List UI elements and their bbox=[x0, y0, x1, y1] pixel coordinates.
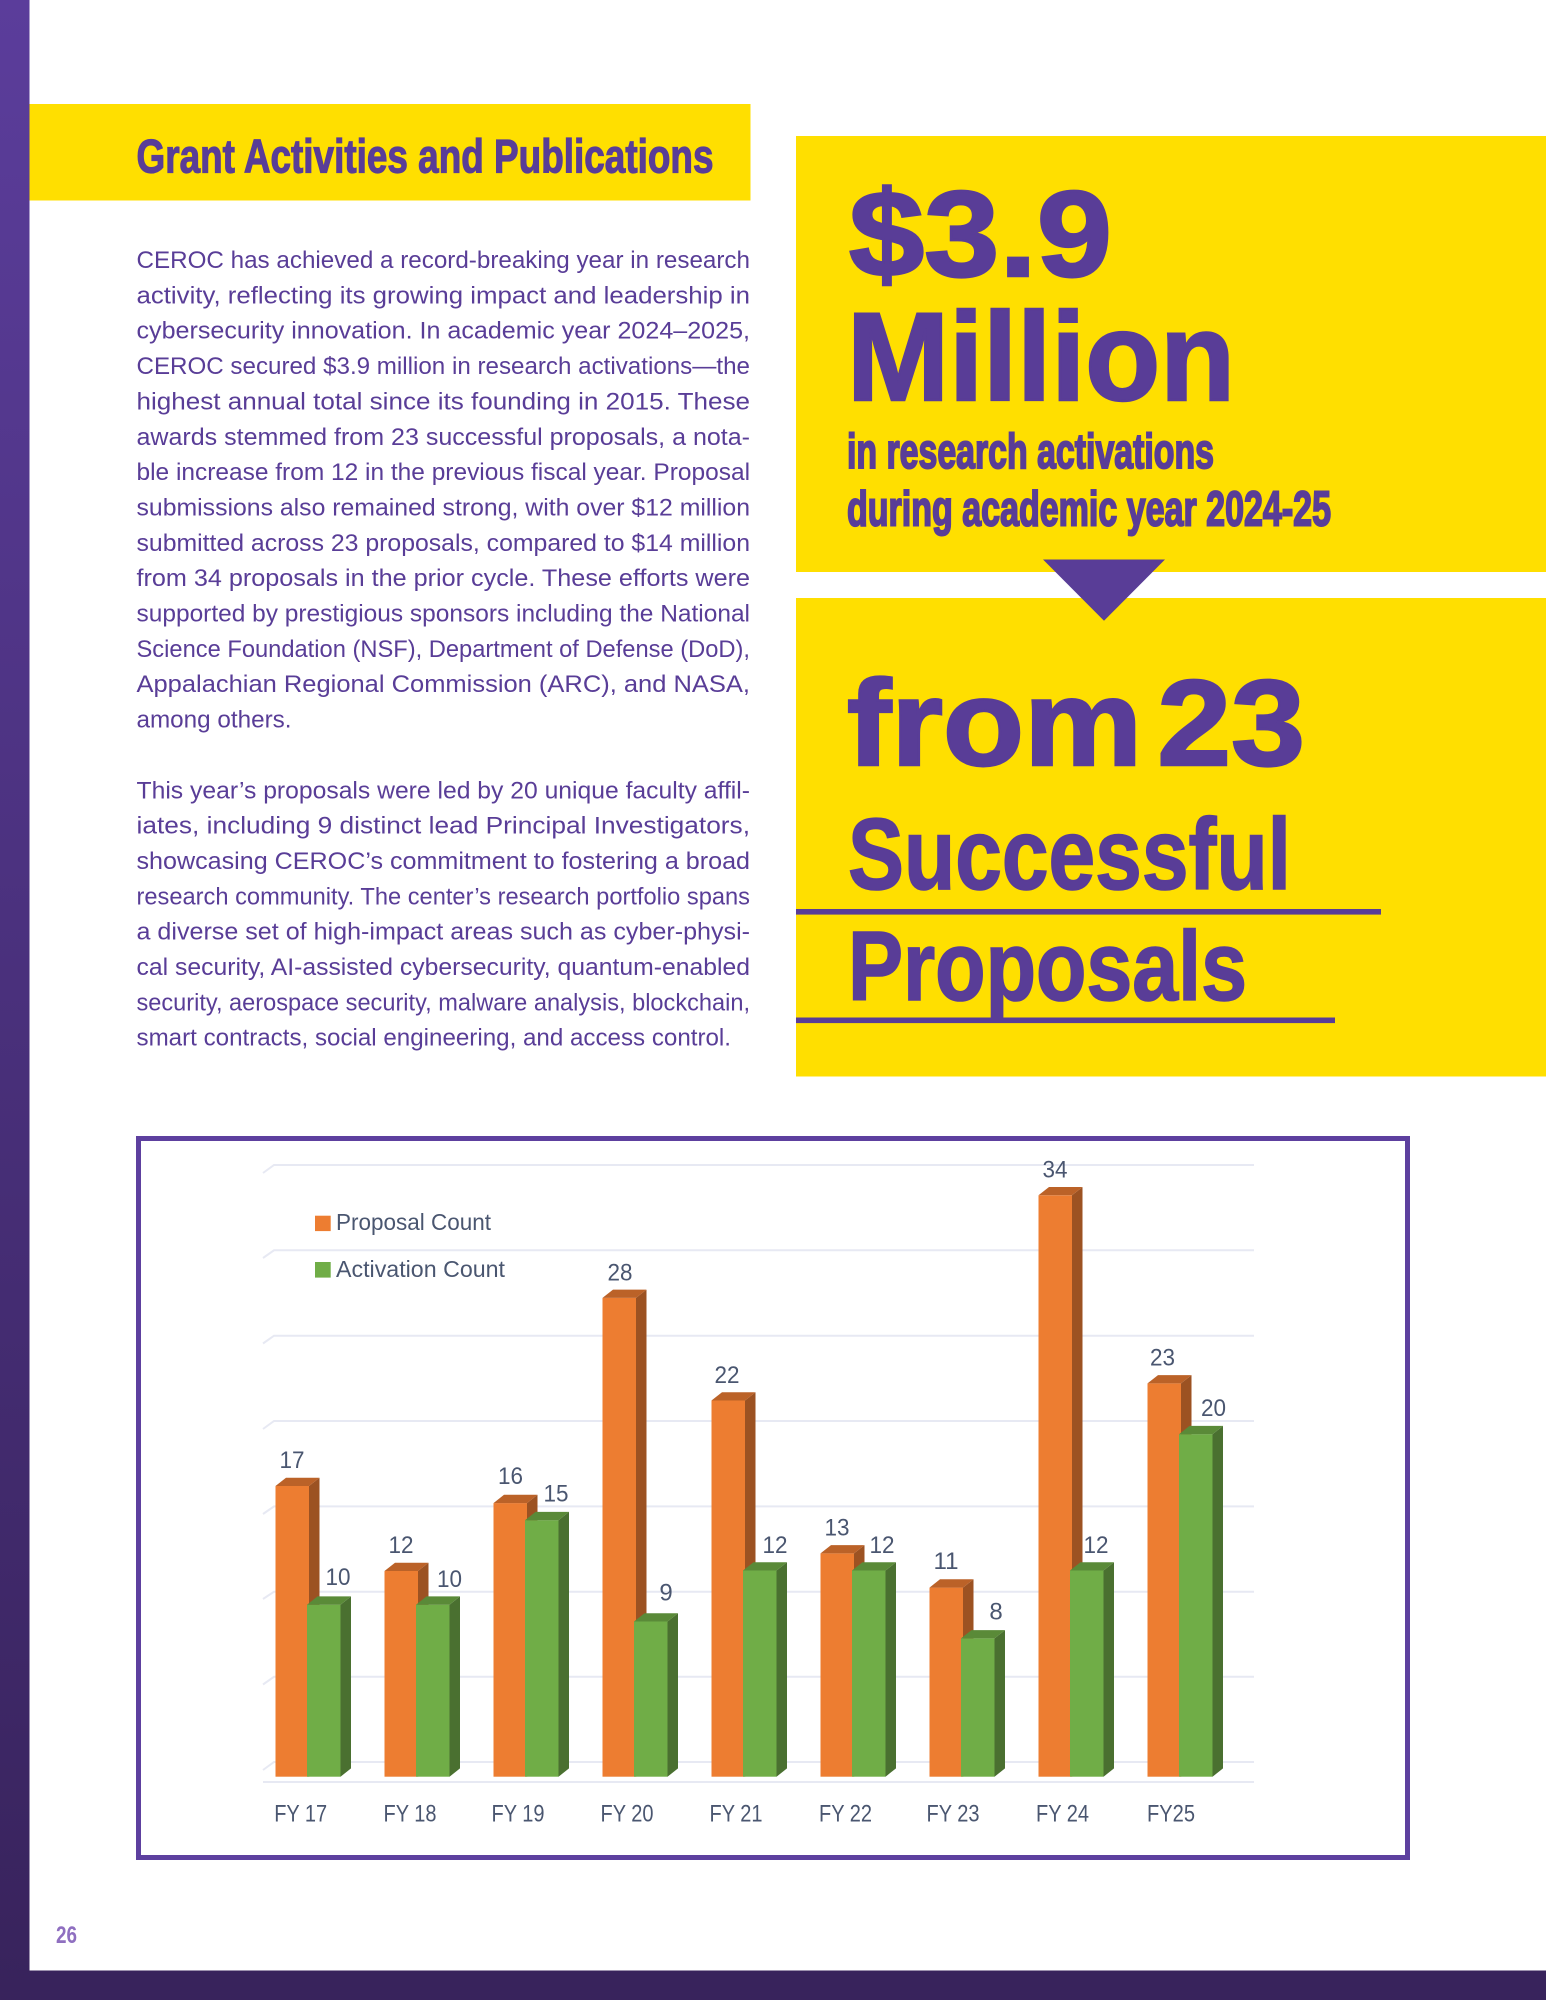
body text: second paragraph bbox=[136, 777, 750, 1052]
body text: second paragraph: showcasing CEROC’s commitment to fostering a broad bbox=[136, 848, 750, 875]
rule under Proposals bbox=[796, 1018, 1335, 1023]
x-axis labels: FY 21 bbox=[710, 1800, 762, 1828]
body text: first paragraph: submitted across 23 proposals, compared to $14 million bbox=[136, 530, 750, 557]
body text: first paragraph: Science Foundation (NSF), Department of Defense (DoD), bbox=[136, 636, 750, 663]
x-axis labels: FY 24 bbox=[1036, 1800, 1089, 1828]
data labels: 12 bbox=[388, 1532, 414, 1559]
body text: first paragraph: cybersecurity innovation. In academic year 2024–2025, bbox=[136, 318, 750, 345]
bar group: FY 18 bbox=[384, 1563, 460, 1777]
bar group: FY 21 bbox=[712, 1392, 787, 1777]
big figure unit: Million bbox=[847, 288, 1235, 427]
x-axis labels: FY 18 bbox=[384, 1800, 436, 1828]
rule under Successful bbox=[796, 909, 1381, 915]
body text: first paragraph: awards stemmed from 23 successful proposals, a nota- bbox=[136, 424, 750, 451]
body text: second paragraph: smart contracts, social engineering, and access control. bbox=[136, 1025, 731, 1052]
bar group: FY 20 bbox=[602, 1290, 678, 1777]
from 23: from 23 bbox=[847, 655, 1305, 791]
data labels: 20 bbox=[1201, 1395, 1226, 1422]
legend bbox=[315, 1209, 506, 1282]
data labels: 9 bbox=[659, 1580, 673, 1606]
body text: first paragraph: ble increase from 12 in the previous fiscal year. Proposal bbox=[136, 459, 750, 486]
left sidebar bbox=[0, 0, 30, 2000]
Proposals: Proposals bbox=[848, 911, 1247, 1021]
data labels: 34 bbox=[1042, 1156, 1068, 1184]
body text: first paragraph: CEROC secured $3.9 million in research activations—the bbox=[136, 353, 750, 380]
data labels: 10 bbox=[437, 1566, 462, 1593]
bar group: FY 23 bbox=[930, 1579, 1005, 1777]
bar group: FY 17 bbox=[276, 1478, 351, 1777]
body text: first paragraph: supported by prestigious sponsors including the National bbox=[136, 600, 750, 628]
bar group: FY25 bbox=[1148, 1375, 1223, 1777]
body text: first paragraph: among others. bbox=[136, 707, 292, 734]
caption bbox=[847, 425, 1331, 536]
body text: first paragraph: submissions also remained strong, with over $12 million bbox=[136, 494, 750, 522]
body text: first paragraph: highest annual total since its founding in 2015. These bbox=[136, 388, 750, 415]
bottom bar bbox=[0, 1970, 1546, 2000]
data labels: 23 bbox=[1150, 1344, 1175, 1372]
body text: second paragraph: research community. The center’s research portfolio spans bbox=[136, 883, 750, 910]
caption: in research activations bbox=[847, 425, 1214, 479]
panel: successful proposals callout bbox=[796, 598, 1546, 1076]
heading: Grant Activities and Publications bbox=[136, 130, 714, 182]
bar group: FY 22 bbox=[820, 1545, 896, 1777]
body text: first paragraph bbox=[136, 247, 750, 734]
body text: second paragraph: iates, including 9 distinct lead Principal Investigators, bbox=[136, 813, 750, 840]
chart frame bbox=[138, 1138, 1408, 1858]
data labels: 22 bbox=[714, 1362, 740, 1389]
bar group: FY 24 bbox=[1038, 1187, 1114, 1777]
big figure: $3.9 bbox=[849, 166, 1112, 302]
body text: first paragraph: from 34 proposals in the prior cycle. These efforts were bbox=[136, 565, 750, 592]
x-axis labels: FY 17 bbox=[274, 1800, 327, 1828]
x-axis labels: FY 20 bbox=[600, 1800, 654, 1828]
data labels: 12 bbox=[870, 1532, 894, 1559]
data labels: 16 bbox=[498, 1463, 523, 1490]
body text: second paragraph: cal security, AI-assisted cybersecurity, quantum-enabled bbox=[136, 954, 750, 981]
legend: Activation Count bbox=[336, 1256, 506, 1282]
data labels: 17 bbox=[280, 1447, 304, 1474]
body text: first paragraph: CEROC has achieved a record-breaking year in research bbox=[136, 247, 750, 274]
data labels: 8 bbox=[989, 1598, 1003, 1626]
data labels: 28 bbox=[608, 1260, 632, 1286]
x-axis labels bbox=[274, 1800, 1195, 1828]
data labels: 15 bbox=[544, 1480, 568, 1508]
x-axis labels: FY 22 bbox=[819, 1800, 872, 1828]
arrow: down triangle between panels bbox=[1043, 560, 1165, 621]
caption: during academic year 2024-25 bbox=[847, 482, 1331, 536]
bar group: FY 19 bbox=[494, 1495, 569, 1777]
body text: first paragraph: activity, reflecting its growing impact and leadership in bbox=[136, 282, 750, 309]
body text: second paragraph: This year’s proposals were led by 20 unique faculty affil- bbox=[136, 777, 750, 804]
Successful: Successful bbox=[848, 799, 1291, 911]
legend: Proposal Count bbox=[336, 1209, 492, 1235]
data labels: 11 bbox=[934, 1548, 958, 1575]
data labels: 12 bbox=[1084, 1532, 1108, 1559]
data labels: 12 bbox=[762, 1532, 788, 1559]
body text: second paragraph: a diverse set of high-impact areas such as cyber-physi- bbox=[136, 919, 750, 946]
data labels: 10 bbox=[326, 1564, 350, 1591]
x-axis labels: FY 23 bbox=[926, 1800, 980, 1828]
x-axis labels: FY 19 bbox=[492, 1800, 544, 1828]
data labels bbox=[280, 1156, 1226, 1626]
panel: $3.9 million callout bbox=[796, 136, 1546, 572]
x-axis labels: FY25 bbox=[1147, 1800, 1195, 1828]
page number: 26 bbox=[56, 1922, 77, 1949]
body text: first paragraph: Appalachian Regional Commission (ARC), and NASA, bbox=[136, 671, 750, 698]
data labels: 13 bbox=[824, 1514, 850, 1542]
chart panel bbox=[138, 1138, 1408, 1858]
body text: second paragraph: security, aerospace security, malware analysis, blockchain, bbox=[136, 989, 750, 1016]
heading band bbox=[30, 104, 750, 200]
